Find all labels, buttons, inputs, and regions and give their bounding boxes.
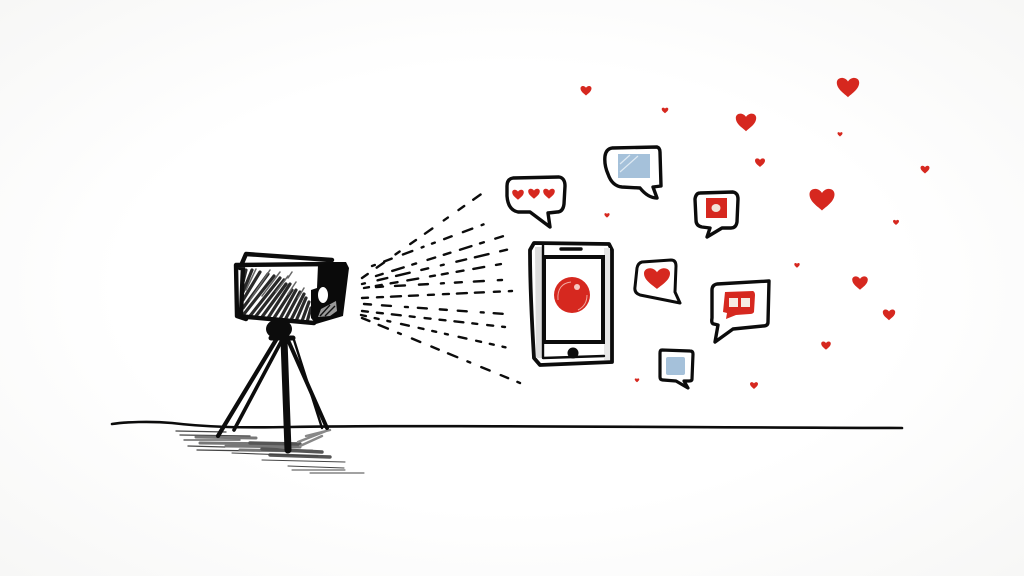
signal dashed rays bbox=[361, 190, 520, 383]
speech bubble: red heart bbox=[635, 260, 680, 303]
ground shadow bbox=[176, 430, 364, 473]
camera front with lens bbox=[311, 262, 349, 324]
speech bubble: small blue image bbox=[660, 350, 693, 388]
phone screen bbox=[544, 257, 603, 342]
phone speaker bbox=[561, 247, 581, 251]
speech bubble: blue image bbox=[605, 147, 661, 198]
ground line bbox=[112, 422, 902, 428]
speech bubble: red chat bbox=[712, 281, 769, 342]
phone bbox=[530, 243, 612, 365]
speech bubble: three hearts bbox=[507, 177, 565, 227]
speech bubble: red square bbox=[695, 192, 738, 237]
camera outline bbox=[236, 254, 332, 323]
phone home button bbox=[568, 348, 578, 358]
camera body hatching bbox=[243, 269, 311, 322]
tripod bbox=[218, 319, 327, 450]
record button bbox=[554, 277, 590, 313]
floating hearts bbox=[580, 78, 930, 389]
camera bbox=[236, 254, 349, 324]
